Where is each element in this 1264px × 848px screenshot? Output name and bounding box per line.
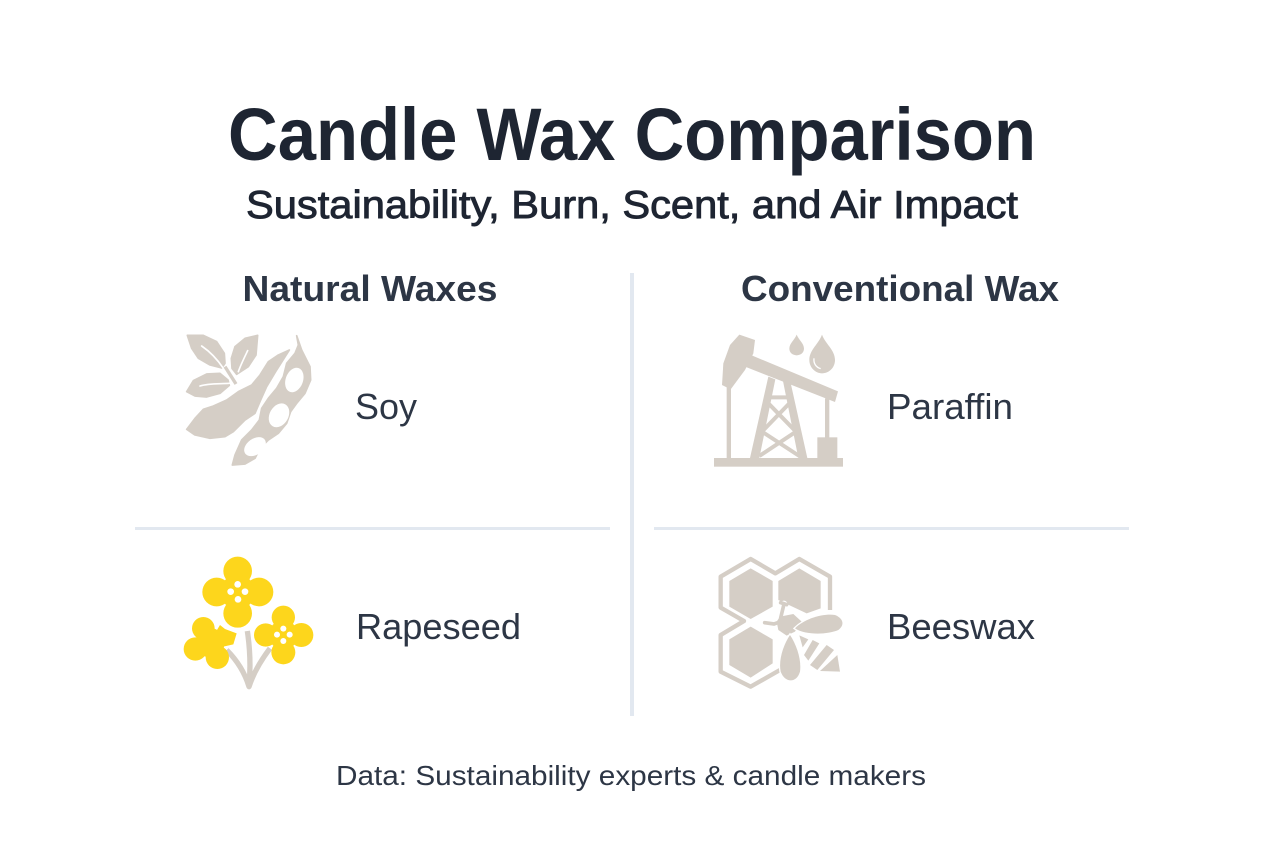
heading: natural waxes: Natural Waxes (242, 268, 498, 309)
honeycomb (721, 559, 830, 687)
bee (765, 603, 842, 680)
source note: Data: Sustainability experts & candle makers (336, 760, 926, 791)
icon: soy (187, 335, 311, 465)
icon: rapeseed flower (184, 557, 313, 687)
icon: honeycomb and bee (721, 559, 842, 687)
icon: oil pump (714, 335, 843, 467)
label: rapeseed: Rapeseed (356, 606, 521, 647)
title: Candle Wax Comparison (228, 93, 1036, 176)
label: beeswax: Beeswax (887, 606, 1035, 647)
subtitle: Sustainability, Burn, Scent, and Air Impact (246, 184, 1018, 227)
label: paraffin: Paraffin (887, 386, 1013, 427)
label: soy: Soy (355, 386, 417, 427)
heading: conventional wax: Conventional Wax (741, 268, 1059, 309)
